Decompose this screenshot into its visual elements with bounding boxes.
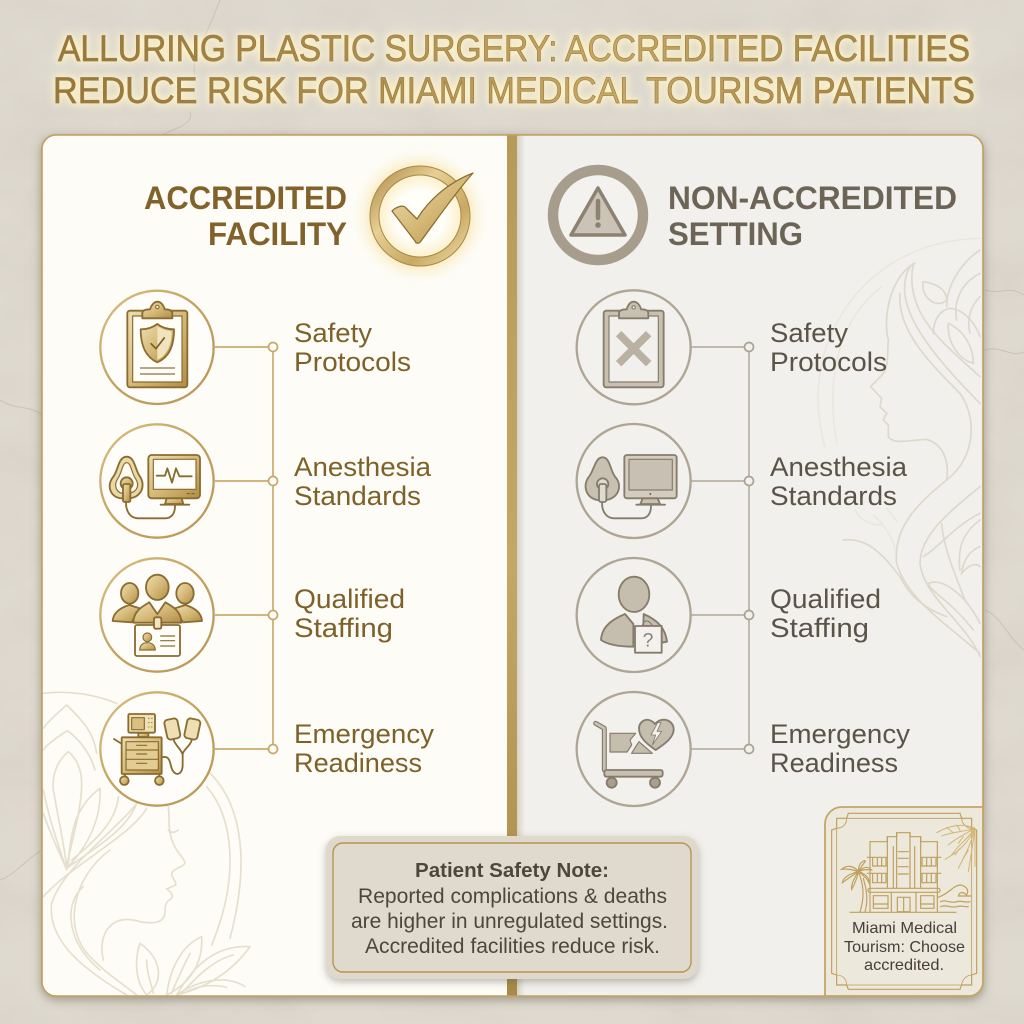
miami card: Tourism: Choose [844, 939, 965, 956]
left labels [294, 318, 435, 778]
callout: patient safety note: Patient Safety Note: [415, 860, 609, 882]
right labels: Safety [770, 318, 849, 348]
accredited heading [144, 186, 346, 246]
decorative woman profile and hair [818, 238, 980, 657]
icon: broken cart and heart [577, 692, 691, 806]
non-accredited heading: SETTING [668, 216, 803, 252]
left labels: Anesthesia [294, 452, 432, 482]
connector lines [215, 342, 278, 754]
icon: blank monitor and mask [577, 424, 691, 538]
right labels: Emergency [770, 719, 911, 749]
connector lines [691, 342, 754, 754]
left labels: Protocols [294, 347, 411, 377]
icon: warning badge [553, 170, 643, 260]
title: REDUCE RISK FOR MIAMI MEDICAL TOURISM PATIENTS [53, 70, 975, 111]
icon: unverified staff member [577, 558, 691, 672]
icon: gold check badge [358, 154, 482, 278]
non-accredited heading: NON-ACCREDITED [668, 180, 957, 216]
right labels: Standards [770, 481, 897, 511]
title [53, 28, 975, 111]
icon: qualified team with id badge [100, 558, 214, 672]
left labels: Readiness [294, 748, 422, 778]
left labels: Emergency [294, 719, 435, 749]
non-accredited heading [668, 186, 956, 246]
panel: non-accredited setting [517, 135, 983, 996]
right labels: Readiness [770, 748, 898, 778]
callout: patient safety note: are higher in unregulated settings. [351, 910, 668, 933]
right labels: Protocols [770, 347, 887, 377]
callout: patient safety note: Reported complications & deaths [358, 885, 667, 908]
icon: unverified staff member: ? [643, 631, 654, 652]
left labels: Safety [294, 318, 373, 348]
panel: accredited facility [42, 135, 507, 996]
left labels: Qualified [294, 584, 405, 614]
accredited heading: FACILITY [208, 216, 347, 252]
callout: patient safety note: Accredited facilities reduce risk. [365, 935, 660, 958]
right labels: Anesthesia [770, 452, 908, 482]
miami card [825, 807, 983, 996]
accredited heading: ACCREDITED [144, 180, 347, 216]
left labels: Standards [294, 481, 421, 511]
callout: patient safety note [326, 836, 698, 979]
decorative woman profile and leaves [43, 692, 250, 995]
panel frame [42, 135, 983, 996]
panel outline [42, 135, 983, 996]
card art-deco frame [832, 813, 977, 989]
center gold divider [507, 135, 525, 996]
icon: safety clipboard [100, 291, 214, 404]
right labels: Staffing [770, 613, 869, 643]
miami card: Miami Medical [852, 920, 957, 937]
miami card: accredited. [864, 957, 944, 974]
right labels [770, 318, 911, 778]
icon: crossed clipboard [577, 290, 691, 404]
right labels: Qualified [770, 584, 881, 614]
left labels: Staffing [294, 613, 393, 643]
icon: emergency crash cart [100, 692, 214, 806]
icon: anesthesia mask and monitor [100, 424, 214, 538]
card art: miami building, palms, wave [842, 825, 975, 912]
